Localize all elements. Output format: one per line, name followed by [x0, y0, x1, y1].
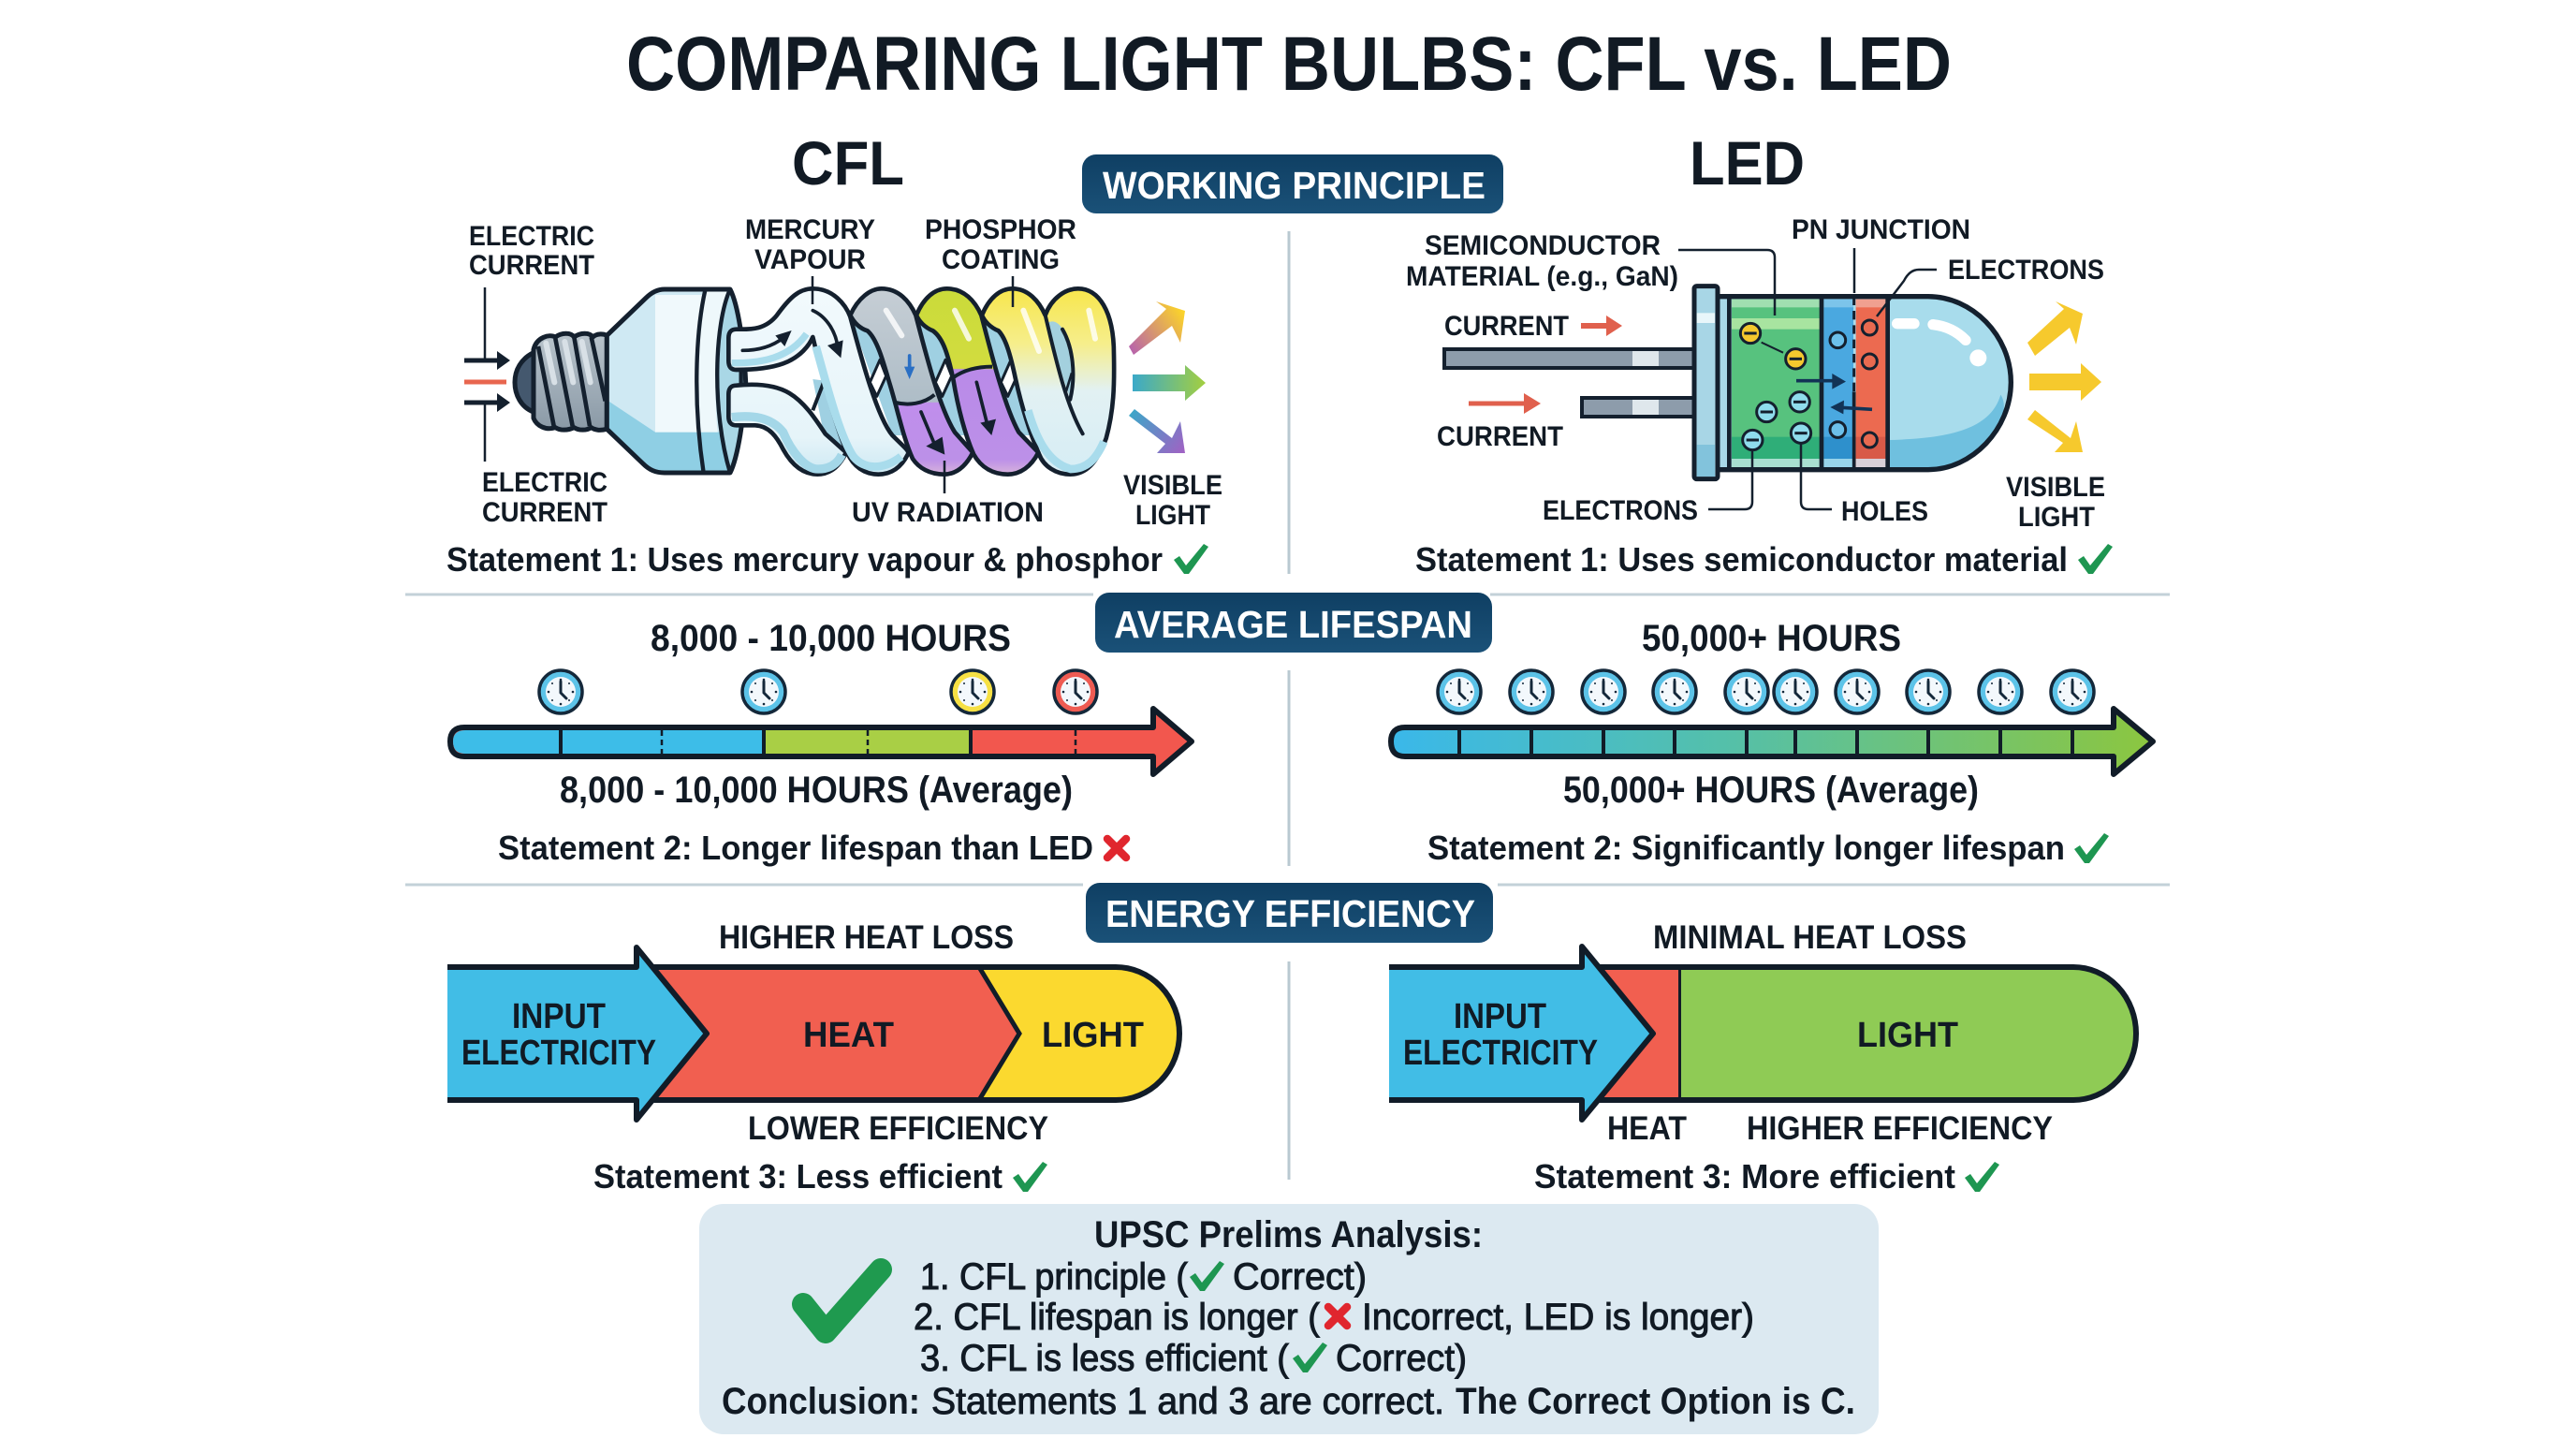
- dome lens: [1694, 286, 2011, 479]
- energy flow diagram: ELECTRICITY: [461, 1034, 656, 1073]
- energy flow diagram: ELECTRICITY: [1403, 1034, 1598, 1073]
- back of coil: [812, 316, 1083, 448]
- labels: ELECTRIC: [482, 467, 607, 498]
- hours heading: 50,000+ HOURS: [1642, 618, 1901, 659]
- labels: LIGHT: [1135, 500, 1210, 531]
- highlights: [886, 311, 1095, 351]
- label: minimal heat loss: MINIMAL HEAT LOSS: [1653, 919, 1967, 956]
- statement 1 CFL: Statement 1: Uses mercury vapour & phosphor: [446, 540, 1163, 579]
- average label: 8,000 - 10,000 HOURS (Average): [560, 770, 1073, 811]
- analysis item 1: 1. CFL principle (: [920, 1256, 1189, 1298]
- band C: green and purple: [916, 288, 1038, 475]
- icon: CFL bulb: [515, 288, 1114, 475]
- band A: white tube: [728, 288, 908, 475]
- section badge: energy efficiency: [1086, 883, 1493, 943]
- icon: large check: [803, 1269, 881, 1332]
- icon: LED: [1444, 286, 2011, 479]
- timeline arrow: [450, 709, 1192, 774]
- labels: ELECTRIC: [469, 221, 594, 252]
- conclusion: Conclusion:: [722, 1381, 920, 1422]
- timeline arrow: [1391, 709, 2153, 774]
- analysis heading: UPSC Prelims Analysis:: [1094, 1214, 1483, 1255]
- section badge: working principle: [1082, 154, 1503, 213]
- dividers: [405, 231, 2170, 1180]
- labels: PN JUNCTION: [1792, 214, 1970, 245]
- title: COMPARING LIGHT BULBS: CFL vs. LED: [626, 22, 1952, 107]
- screw base and collar: [515, 289, 746, 473]
- gaps and hatching: [870, 360, 1017, 396]
- labels: COATING: [942, 244, 1060, 275]
- electric current arrows: [464, 287, 510, 462]
- labels: SEMICONDUCTOR: [1425, 230, 1661, 261]
- leads: [1444, 349, 1697, 417]
- energy flow diagram: [447, 947, 1179, 1120]
- labels: [1406, 214, 2105, 533]
- label: lower efficiency: LOWER EFFICIENCY: [748, 1110, 1048, 1147]
- dome highlights: [1897, 324, 1966, 340]
- labels: VISIBLE: [1123, 470, 1222, 501]
- visible light arrows: [2027, 301, 2101, 452]
- label: higher efficiency: HIGHER EFFICIENCY: [1747, 1110, 2053, 1147]
- labels: CURRENT: [1444, 311, 1569, 342]
- statement 3 CFL: Statement 3: Less efficient: [593, 1157, 1003, 1196]
- section badge: energy efficiency: ENERGY EFFICIENCY: [1105, 892, 1475, 935]
- labels: ELECTRONS: [1948, 255, 2104, 286]
- statement 2 CFL: Statement 2: Longer lifespan than LED: [498, 829, 1093, 867]
- flange: [1694, 286, 1718, 479]
- carriers: [1740, 320, 1877, 450]
- analysis item 1: [920, 1256, 1367, 1298]
- labels: CURRENT: [469, 250, 594, 281]
- label: higher heat loss: HIGHER HEAT LOSS: [719, 919, 1014, 956]
- section badge: average lifespan: [1095, 593, 1492, 653]
- labels: HOLES: [1841, 496, 1928, 527]
- semiconductor layers: [1720, 297, 1888, 470]
- conclusion: Statements 1 and 3 are correct.: [931, 1381, 1444, 1422]
- labels: CURRENT: [1437, 421, 1563, 452]
- flow arrows: [742, 311, 988, 448]
- labels: VISIBLE: [2006, 472, 2105, 503]
- visible light arrows: [1129, 301, 1206, 453]
- clocks: [1438, 670, 2094, 713]
- labels: [469, 214, 1222, 531]
- statement 3 LED: Statement 3: More efficient: [1534, 1157, 1955, 1196]
- analysis item 2: Incorrect, LED is longer): [1362, 1297, 1754, 1338]
- labels: PHOSPHOR: [925, 214, 1076, 245]
- section badge: working principle: WORKING PRINCIPLE: [1103, 164, 1486, 207]
- energy flow diagram: INPUT: [512, 997, 606, 1036]
- conclusion: The Correct Option is C.: [1456, 1381, 1855, 1422]
- column heading: LED: LED: [1690, 128, 1805, 198]
- band B: grey and purple: [850, 288, 973, 475]
- label: heat: HEAT: [1607, 1110, 1687, 1147]
- panel: CFL lifespan: [450, 618, 1192, 867]
- band D and E: yellow: [982, 288, 1114, 475]
- labels: VAPOUR: [754, 244, 866, 275]
- energy flow diagram: [1389, 946, 2136, 1120]
- average label: 50,000+ HOURS (Average): [1563, 770, 1979, 811]
- analysis item 3: Correct): [1336, 1338, 1467, 1379]
- labels: MERCURY: [745, 214, 875, 245]
- statement 2 LED: Statement 2: Significantly longer lifespan: [1427, 829, 2065, 867]
- clocks: [539, 670, 1097, 713]
- labels: MATERIAL (e.g., GaN): [1406, 261, 1678, 292]
- labels: LIGHT: [2018, 502, 2095, 533]
- conclusion: [722, 1381, 1855, 1422]
- panel: UPSC prelims analysis: [699, 1204, 1879, 1434]
- leader lines: [812, 276, 1013, 493]
- energy flow diagram: LIGHT: [1857, 1016, 1958, 1055]
- panel: CFL energy flow: [447, 919, 1179, 1196]
- spiral tube: [728, 288, 1114, 475]
- panel: CFL working principle: [446, 214, 1222, 579]
- labels: CURRENT: [482, 497, 607, 528]
- panel: LED lifespan: [1391, 618, 2153, 867]
- panel: LED working principle: [1406, 214, 2113, 579]
- panel: LED energy flow: [1389, 919, 2136, 1196]
- junction arrows: [1796, 381, 1872, 409]
- labels: ELECTRONS: [1543, 495, 1698, 526]
- labels: UV RADIATION: [852, 497, 1044, 528]
- energy flow diagram: HEAT: [803, 1016, 894, 1055]
- column heading: CFL: CFL: [792, 128, 904, 198]
- panel background: [699, 1204, 1879, 1434]
- statement 1 LED: Statement 1: Uses semiconductor material: [1415, 540, 2068, 579]
- analysis item 1: Correct): [1233, 1256, 1367, 1298]
- hours heading: 8,000 - 10,000 HOURS: [651, 618, 1011, 659]
- current arrows: [1469, 315, 1622, 414]
- energy flow diagram: LIGHT: [1042, 1016, 1144, 1055]
- leader lines: [1678, 248, 1937, 509]
- energy flow diagram: INPUT: [1454, 997, 1546, 1036]
- analysis item 2: 2. CFL lifespan is longer (: [914, 1297, 1321, 1338]
- lower tube: [728, 385, 846, 475]
- section badge: average lifespan: AVERAGE LIFESPAN: [1114, 603, 1472, 646]
- analysis item 2: [914, 1297, 1754, 1338]
- analysis item 3: 3. CFL is less efficient (: [920, 1338, 1290, 1379]
